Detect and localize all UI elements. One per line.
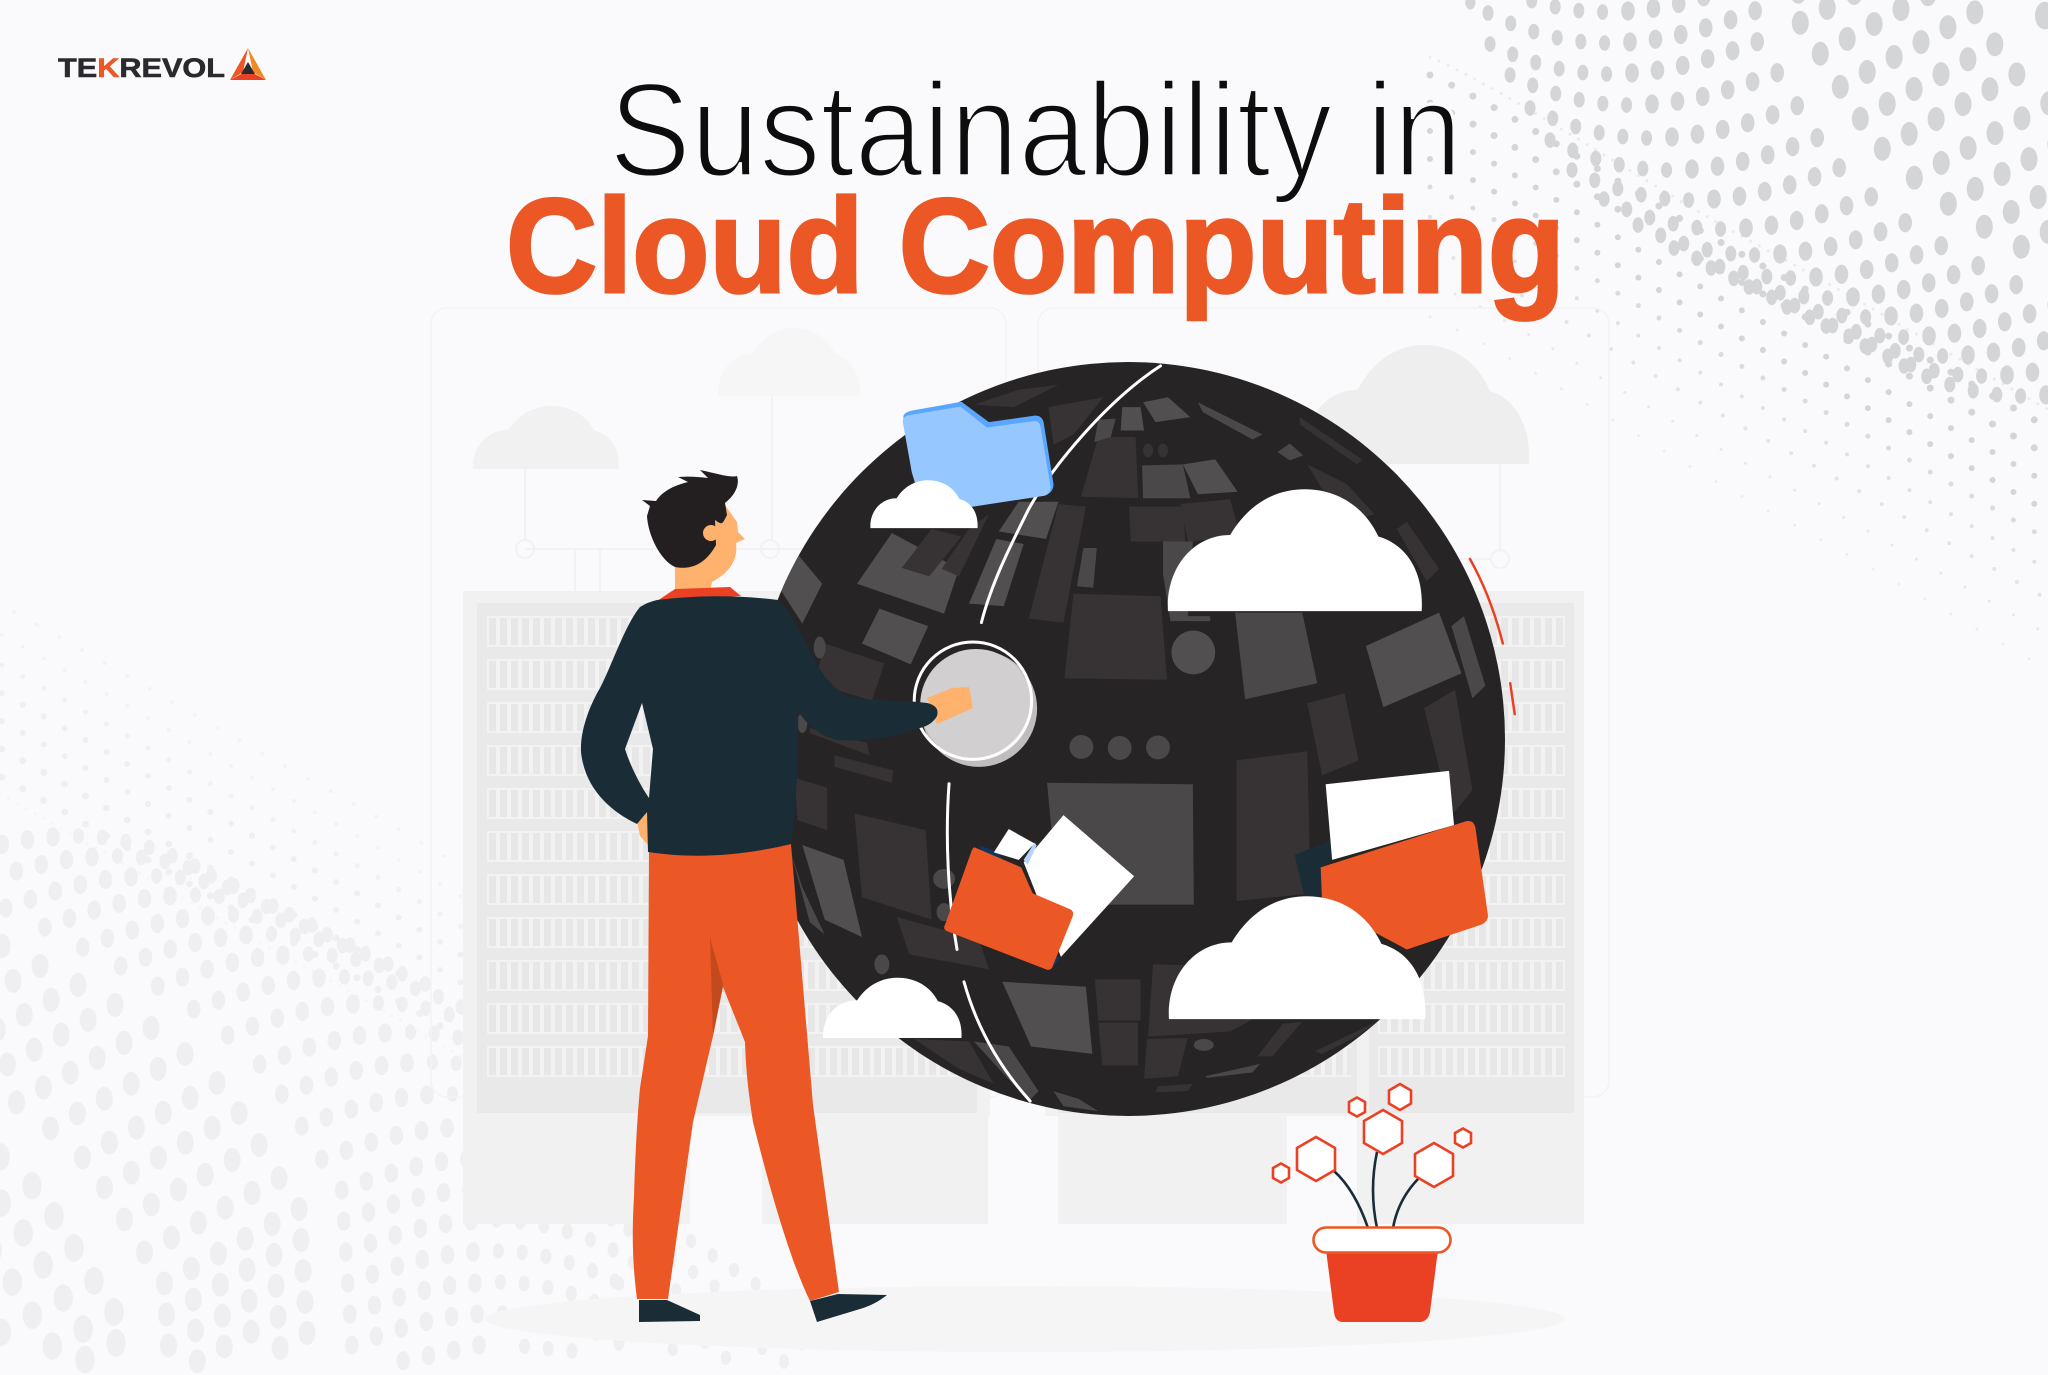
title <box>506 56 1565 321</box>
red motion ticks <box>1470 559 1515 714</box>
faint connector lines <box>516 397 1509 591</box>
icon: large white cloud top <box>1168 489 1422 611</box>
server rack slots <box>487 616 1565 1080</box>
faint cloud right <box>1302 345 1529 464</box>
icon: blue folder <box>903 402 1054 514</box>
icon: small white cloud bottom <box>823 978 962 1038</box>
globe <box>751 362 1515 1116</box>
faint outline frames <box>431 308 1609 1097</box>
logo triangle mark <box>230 48 266 80</box>
icon: orange folder with papers center <box>944 815 1134 970</box>
faint cloud left <box>473 406 619 469</box>
plant hexagons <box>1273 1084 1471 1187</box>
plant pot rim <box>1314 1228 1450 1252</box>
faint cloud center <box>718 328 860 396</box>
globe sphere <box>751 362 1505 1116</box>
man trousers <box>633 844 839 1301</box>
server rack outer frames <box>463 591 1584 1224</box>
icon: small white cloud top <box>870 480 978 528</box>
man ear <box>703 525 719 541</box>
title line two: Cloud Computing <box>506 172 1565 321</box>
man hand on disc <box>927 687 973 724</box>
title line one: Sustainability in <box>609 56 1462 205</box>
globe touch disc <box>914 642 1037 767</box>
icon: orange folder with paper right <box>1295 771 1488 949</box>
figure: man touching the globe <box>581 470 973 1322</box>
ground shadow <box>485 1286 1565 1352</box>
man hand on hip <box>637 811 649 846</box>
man head and neck <box>675 505 745 592</box>
man shoes <box>639 1294 887 1322</box>
man collar <box>657 587 741 601</box>
background dot pattern: top right <box>1284 0 2048 752</box>
icon: large white cloud bottom <box>1169 896 1425 1019</box>
globe white orbit arcs <box>947 366 1160 1101</box>
server rack inner panels <box>477 603 1574 1113</box>
plant with hexagon leaves <box>1273 1084 1471 1322</box>
logo: TekRevol <box>58 48 266 83</box>
background dot pattern: bottom left <box>0 550 801 1362</box>
plant pot <box>1326 1250 1438 1322</box>
logo wordmark: TEKREVOL <box>58 53 225 83</box>
globe surface tiles <box>780 366 1515 1111</box>
man hair <box>642 470 738 568</box>
plant stems <box>1334 1152 1418 1228</box>
background scene: faint data center <box>431 308 1609 1352</box>
man sweater <box>581 596 938 856</box>
